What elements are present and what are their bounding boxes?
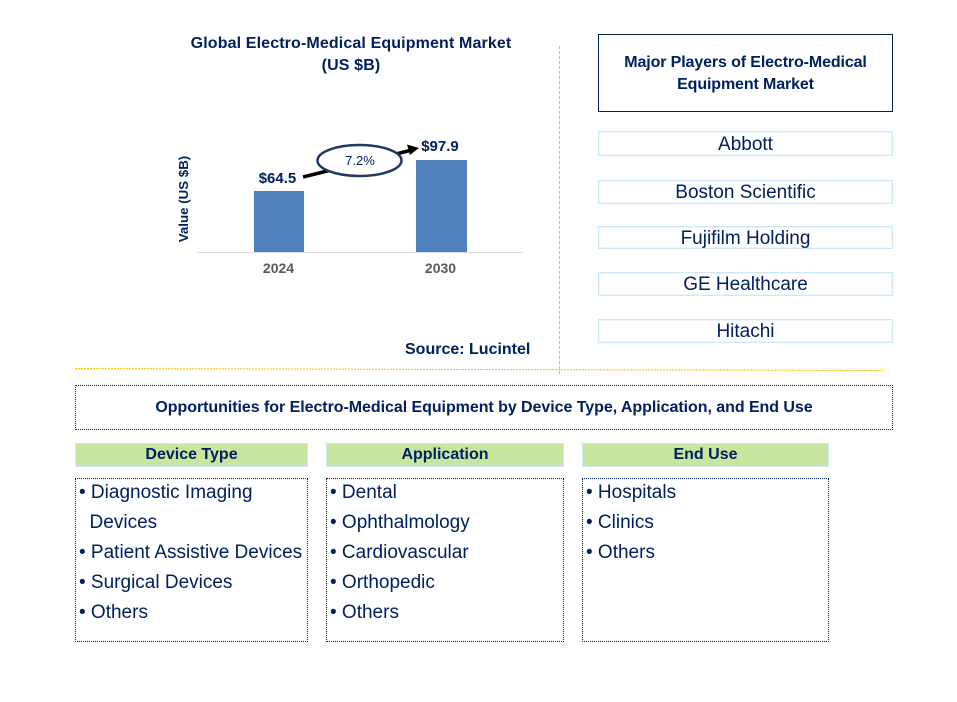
panel: major players heading [598,34,893,112]
source note: Source: Lucintel [405,341,530,358]
growth rate ellipse: 7.2% [345,153,375,168]
growth arrow [303,144,419,177]
player: Boston Scientific [598,180,893,204]
vertical divider [559,46,560,374]
player: Fujifilm Holding [598,226,893,249]
player: GE Healthcare: GE Healthcare [683,274,808,295]
list: end uses [582,478,829,642]
list: device types: • Others [79,602,148,623]
column header: Application: Application [401,446,489,463]
bar chart [176,138,523,276]
panel: major players heading: Major Players of Electro-Medical [624,54,867,71]
column header: Device Type [75,443,308,467]
y axis label: Value (US $B) [176,156,191,242]
value label 2030: $97.9 [421,138,459,155]
player: Hitachi: Hitachi [716,321,775,342]
player: Hitachi [598,319,893,343]
list: applications: • Cardiovascular [330,542,469,563]
growth rate ellipse [318,145,402,176]
bar 2030 [416,160,467,252]
list: applications: • Orthopedic [330,572,435,593]
player: Boston Scientific: Boston Scientific [675,182,816,203]
opportunities heading: Opportunities for Electro-Medical Equipment by Device Type, Application, and End Use [155,399,813,416]
horizontal divider [75,368,883,371]
column header: End Use [582,443,829,467]
opportunities heading [75,385,893,430]
value label 2024: $64.5 [259,170,296,187]
player: Abbott: Abbott [718,134,773,155]
list: device types: • Patient Assistive Devices [79,542,302,563]
list: end uses: • Others [586,542,655,563]
list: device types [75,478,308,642]
category label 2024: 2024 [263,260,294,276]
list: device types: • Diagnostic Imaging [79,482,253,503]
column header: Application [326,443,564,467]
player: Fujifilm Holding: Fujifilm Holding [681,228,810,249]
list: end uses: • Hospitals [586,482,676,503]
category label 2030: 2030 [425,260,456,276]
column header: End Use: End Use [673,446,738,463]
list: device types: • Surgical Devices [79,572,232,593]
list: applications: • Others [330,602,399,623]
chart title: (US $B) [322,57,380,74]
panel: major players heading: Equipment Market [677,76,814,93]
list: applications: • Dental [330,482,397,503]
column header: Device Type: Device Type [145,446,238,463]
list: applications: • Ophthalmology [330,512,470,533]
baseline [197,252,523,254]
chart title [191,35,511,74]
list: device types: Devices [90,512,157,533]
chart title: Global Electro-Medical Equipment Market [191,35,511,52]
bar 2024 [254,191,304,252]
player: GE Healthcare [598,272,893,296]
player: Abbott [598,131,893,156]
list: applications [326,478,564,642]
list: end uses: • Clinics [586,512,654,533]
